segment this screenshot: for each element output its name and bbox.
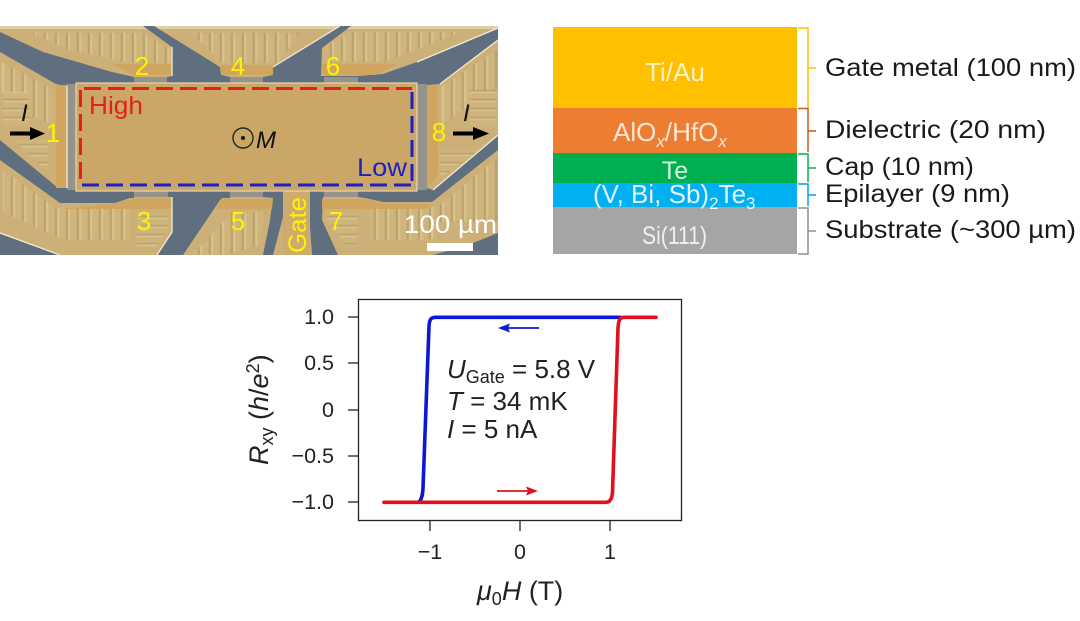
axis ticks <box>348 317 610 531</box>
layer: Si(111) <box>553 207 797 254</box>
x tick labels: 0 <box>514 540 526 564</box>
contact numbers: 3 <box>137 206 151 236</box>
comb finger patterns <box>2 32 497 255</box>
blue sweep curve <box>418 317 621 502</box>
blue dashed edge: low potential <box>82 92 412 185</box>
label: substrate: Substrate (~300 µm) <box>825 216 1076 244</box>
contact numbers: 5 <box>231 206 245 236</box>
red dashed edge: high potential <box>80 88 412 181</box>
conditions text: = 5.8 V <box>505 354 596 384</box>
layer: Si(111): Si(111) <box>642 222 707 250</box>
label: epilayer: Epilayer (9 nm) <box>825 180 1010 208</box>
grey insulating leads <box>0 26 498 255</box>
bracket: epilayer <box>798 184 816 206</box>
layer: Te <box>553 153 797 185</box>
magnetization symbol M <box>232 127 276 149</box>
red sweep curve <box>384 317 656 502</box>
magnetization symbol M: M <box>256 127 276 154</box>
central Hall bar <box>76 83 417 191</box>
y axis title: ) <box>244 354 274 363</box>
y axis title: ( <box>244 411 274 428</box>
scale bar <box>406 215 496 251</box>
x axis title: (T) <box>529 576 563 606</box>
layer: Ti/Au <box>553 27 797 108</box>
y axis title: 2 <box>243 363 263 373</box>
y tick labels <box>292 305 334 514</box>
red direction arrow <box>497 486 538 496</box>
bracket: gate metal <box>798 28 816 108</box>
layer: AlOx/HfOx: AlO <box>613 117 656 147</box>
contact numbers: 8 <box>432 117 446 147</box>
y axis title: R <box>244 446 274 465</box>
y tick labels: −0.5 <box>292 444 334 468</box>
label: gate metal: Gate metal (100 nm) <box>825 54 1076 82</box>
conditions text: T = 34 mK <box>447 386 568 416</box>
label: cap: Cap (10 nm) <box>825 153 974 181</box>
plot frame <box>358 300 682 520</box>
layer: Te: Te <box>662 157 688 185</box>
y axis title: xy <box>257 428 277 446</box>
current arrow in: I <box>21 100 28 127</box>
layer: AlOx/HfOx <box>553 108 797 153</box>
x tick labels <box>418 540 616 564</box>
contact numbers: 7 <box>329 206 343 236</box>
scale bar: 100 µm <box>404 211 497 239</box>
conditions text: Gate <box>466 367 505 387</box>
lighter channel strips <box>67 77 427 197</box>
label: dielectric: Dielectric (20 nm) <box>825 116 1046 144</box>
current arrow out <box>453 104 489 140</box>
panel: hysteresis chart <box>243 300 682 609</box>
y tick labels: 0 <box>322 398 334 422</box>
layer: epilayer: 3 <box>746 194 756 213</box>
layer: AlOx/HfOx: /HfO <box>665 117 718 147</box>
gold contact pads <box>56 64 438 209</box>
y tick labels: −1.0 <box>292 490 334 514</box>
x axis title: H <box>502 576 522 606</box>
contact numbers: 6 <box>326 51 340 81</box>
conditions text: U <box>447 354 466 384</box>
bracket: cap <box>798 154 816 182</box>
x axis title: 0 <box>492 589 502 609</box>
conditions text <box>447 354 596 444</box>
layer: AlOx/HfOx: x <box>655 132 665 151</box>
contact numbers: 2 <box>135 51 149 81</box>
panel: device micrograph <box>0 26 498 255</box>
highlight edges <box>0 26 498 255</box>
contact numbers <box>46 51 446 236</box>
bracket: dielectric <box>798 108 816 152</box>
panel: layer stack <box>553 27 797 254</box>
y tick labels: 0.5 <box>304 351 334 375</box>
layer: epilayer <box>553 179 797 213</box>
label: Low: Low <box>357 154 408 182</box>
contact numbers: 4 <box>231 51 245 81</box>
layer: Ti/Au: Ti/Au <box>645 57 705 87</box>
layer: AlOx/HfOx: x <box>717 132 727 151</box>
y axis title: h/e <box>244 373 274 411</box>
blue direction arrow <box>498 324 539 332</box>
layer: epilayer: Te <box>719 179 746 209</box>
x axis title: μ <box>476 576 492 606</box>
gate bar <box>283 191 310 255</box>
gate label: Gate <box>284 197 312 253</box>
conditions text: I = 5 nA <box>447 414 538 444</box>
x tick labels: 1 <box>604 540 616 564</box>
layer: epilayer: 2 <box>709 194 719 213</box>
label: High: High <box>89 92 143 120</box>
current arrow in <box>10 104 45 140</box>
y tick labels: 1.0 <box>304 305 334 329</box>
contact numbers: 1 <box>46 118 60 148</box>
layer: epilayer: (V, Bi, Sb) <box>593 179 709 209</box>
current arrow out: I <box>463 100 470 127</box>
x tick labels: −1 <box>418 540 442 564</box>
bracket: substrate <box>798 208 816 254</box>
